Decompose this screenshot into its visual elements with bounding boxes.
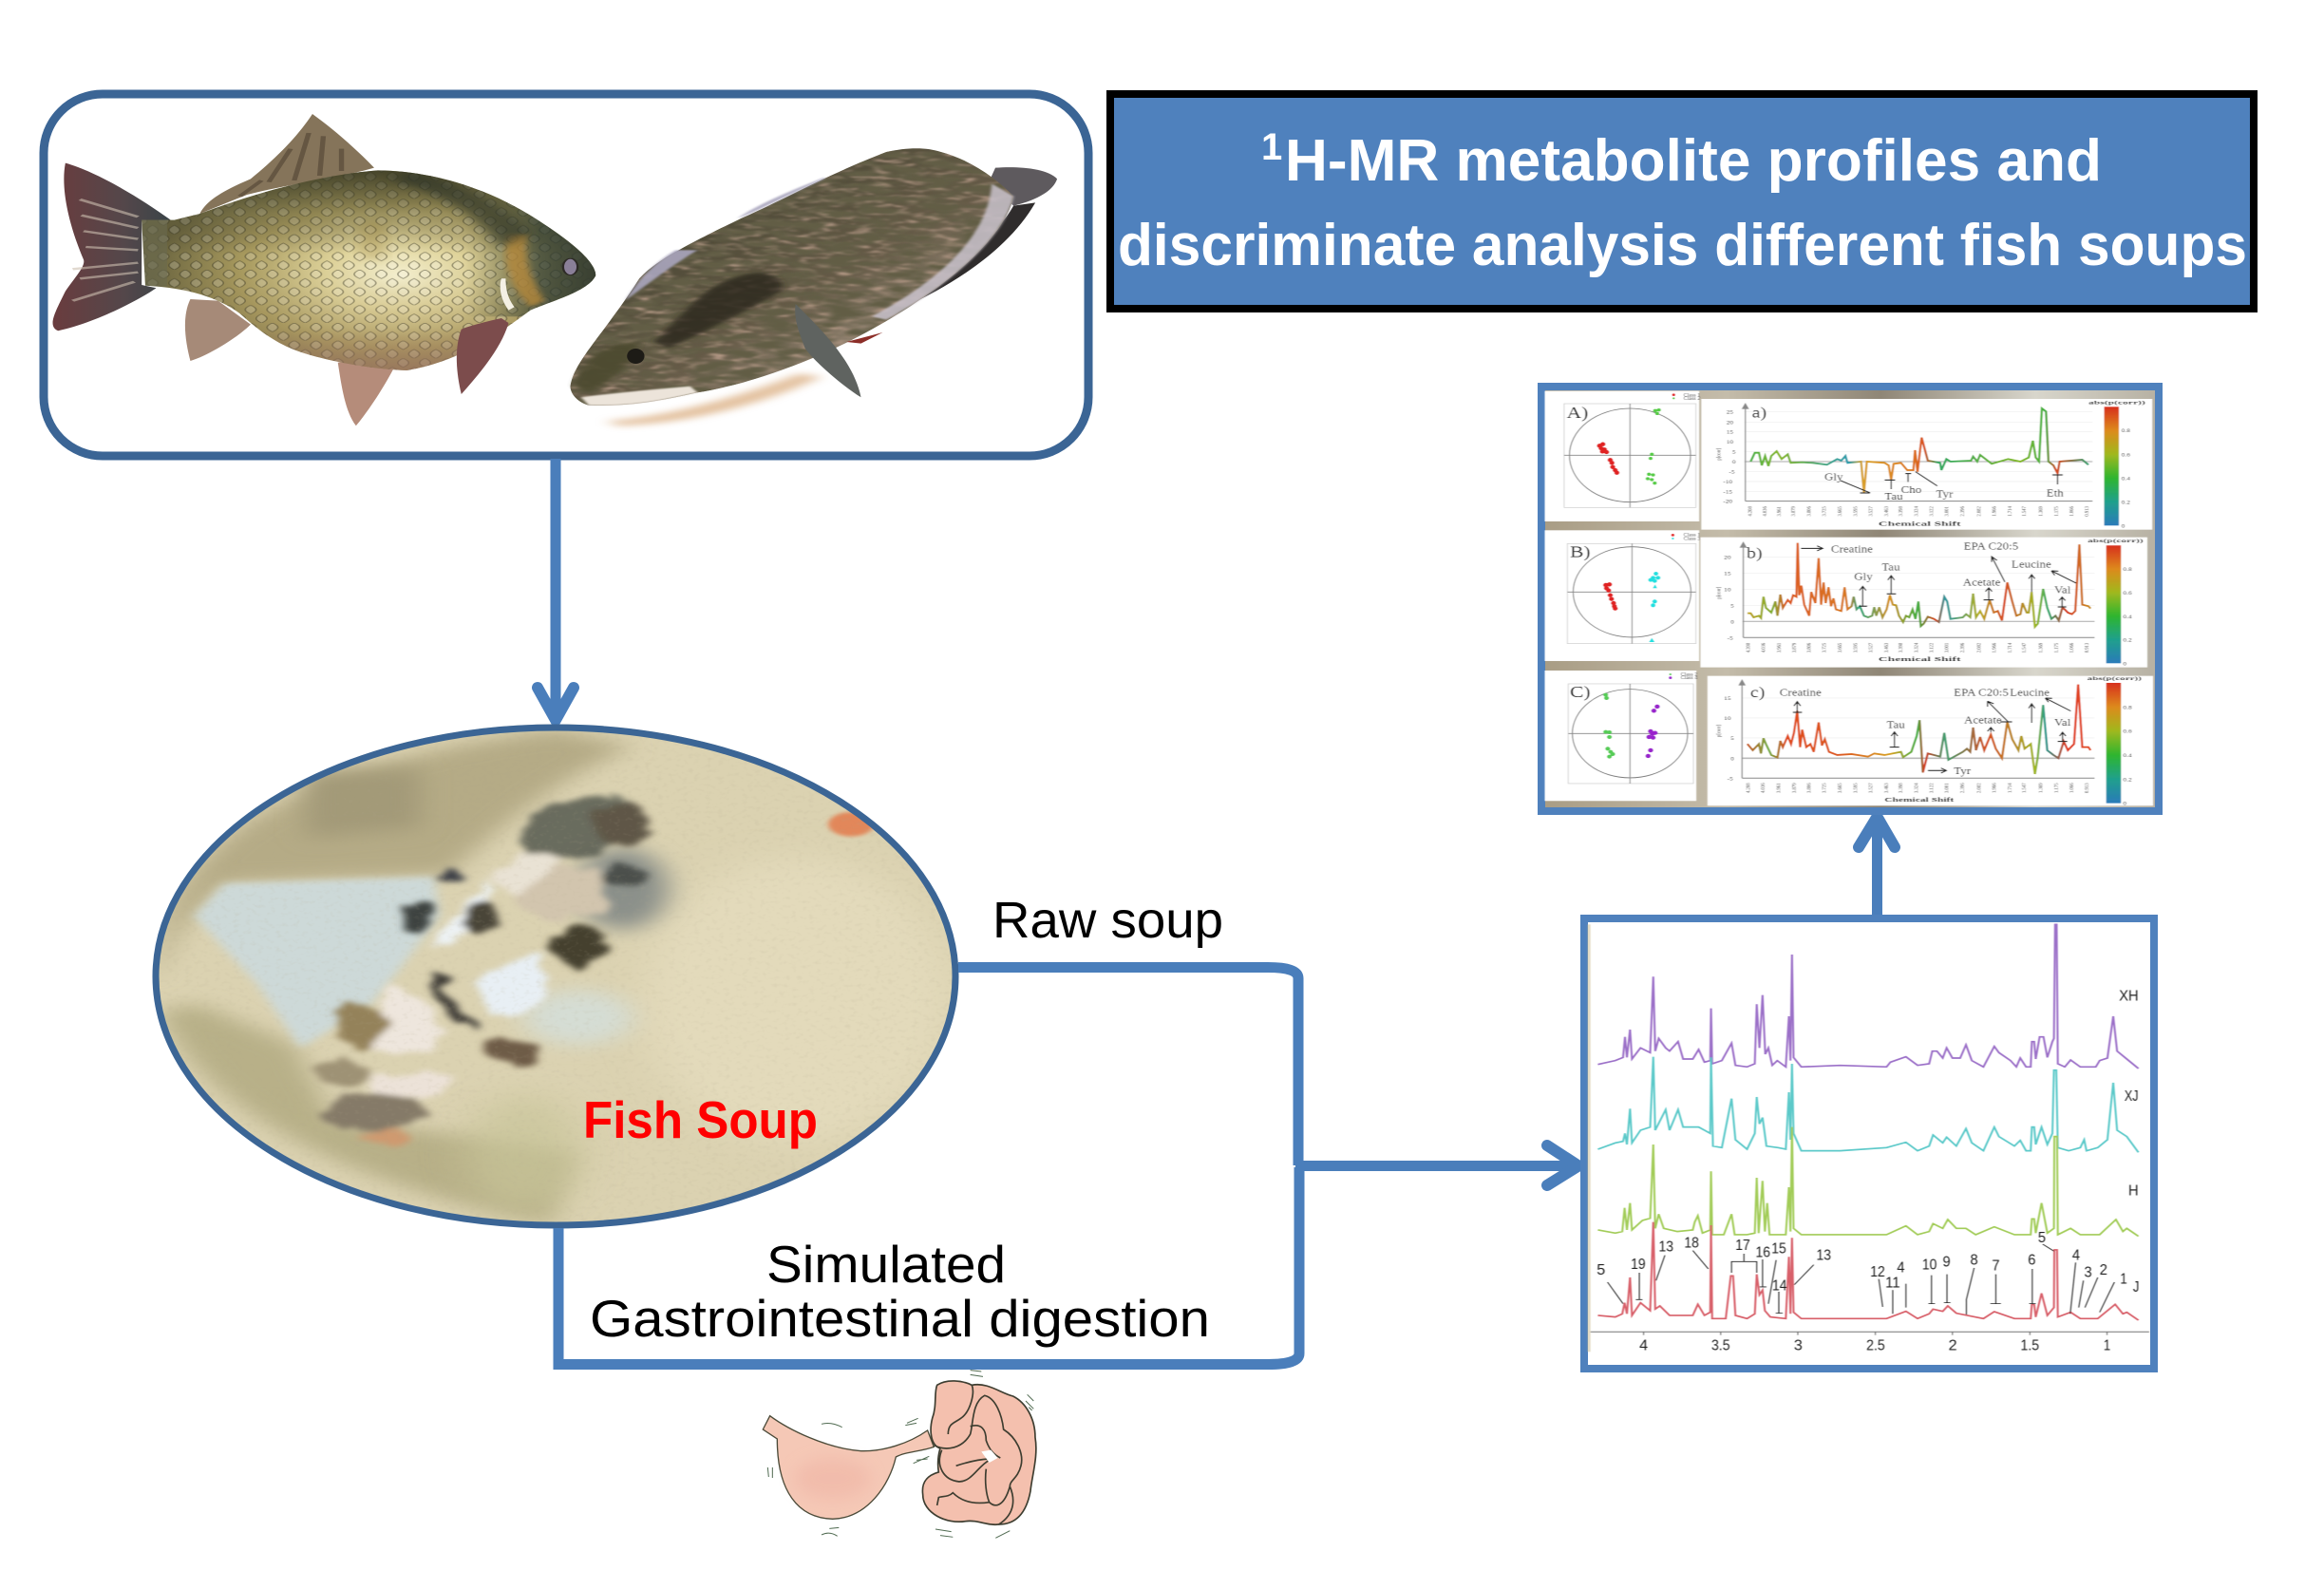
tick labels a: 1.369 (2038, 506, 2045, 517)
tick labels c (1746, 783, 2090, 793)
loading plot a: Cho (1901, 484, 1922, 496)
loading plot b: Gly (1854, 572, 1873, 582)
tick labels a: 1.175 (2053, 506, 2060, 517)
trace: XH (1597, 924, 2139, 1069)
labels: x axis: 3.5 (1711, 1336, 1730, 1353)
labels: x axis: 2.5 (1866, 1336, 1885, 1353)
image: snakehead fish (571, 148, 1057, 426)
loading plot c: 0.6 (2123, 728, 2132, 734)
tick labels a: 3.725 (1822, 506, 1828, 517)
loading plot a: -10 (1723, 480, 1733, 485)
tick labels b: 1.966 (1992, 643, 1998, 653)
loading plot b: 15 (1724, 571, 1731, 577)
trace: H (1597, 1127, 2139, 1237)
tick labels c: 1.175 (2053, 783, 2060, 793)
labels: trace names (2119, 987, 2139, 1296)
labels: peak numbers: 15 (1771, 1239, 1786, 1257)
labels: x axis: 1 (2104, 1336, 2110, 1353)
score plot A (1545, 391, 1701, 521)
panel: fish soup photo (142, 719, 971, 1235)
loading plot c: 0.8 (2123, 705, 2132, 710)
loading plot b: Tau (1881, 562, 1900, 573)
title text: 1 (1261, 126, 1282, 168)
labels: peak numbers: 13 (1817, 1246, 1831, 1263)
loading plot a: -5 (1729, 469, 1735, 475)
tick labels b: 3.324 (1914, 643, 1920, 653)
tick labels b: 3.398 (1898, 643, 1904, 653)
score plot C (1545, 671, 1698, 801)
loading plot a: 0.2 (2122, 500, 2130, 505)
tick labels b: 3.725 (1822, 643, 1828, 653)
loading plot c: Creatine (1780, 688, 1822, 698)
labels: x axis: 3 (1794, 1336, 1803, 1353)
tick labels b: 1.066 (2069, 643, 2075, 653)
labels: peak numbers: 18 (1684, 1234, 1699, 1251)
labels: peak numbers: 10 (1922, 1256, 1937, 1273)
tick labels c: 3.324 (1914, 783, 1920, 793)
loading plot b: 10 (1724, 587, 1731, 593)
chart: stacked spectra (1587, 924, 2149, 1353)
loading plot a: 20 (1727, 420, 1734, 426)
tick labels a: 1.547 (2022, 506, 2028, 517)
title text (1118, 126, 2247, 278)
score plot C: C) (1570, 684, 1591, 701)
labels: peak numbers: 13 (1658, 1238, 1673, 1255)
tick labels c: 0.913 (2085, 783, 2090, 793)
tick labels a: 4.036 (1762, 506, 1768, 517)
loading plot b: Acetate (1963, 577, 2000, 588)
tick labels b: 3.527 (1868, 643, 1875, 653)
labels: peak numbers: 2 (2100, 1261, 2107, 1278)
tick labels c: 3.398 (1898, 783, 1904, 793)
score plot B: Class 3 (1684, 537, 1701, 541)
label: Simulated Gastrointestinal digestion: Gastrointestinal digestion (590, 1289, 1210, 1348)
score plot C: Class 4 (1681, 676, 1698, 681)
tick labels c: 3.122 (1929, 783, 1936, 793)
tick labels b: 1.175 (2053, 643, 2060, 653)
tick labels b: 1.714 (2007, 643, 2013, 653)
label: Simulated Gastrointestinal digestion: Simulated (766, 1235, 1006, 1294)
tick labels c: 3.463 (1883, 783, 1890, 793)
tick labels a: 2.396 (1960, 506, 1966, 517)
loading plot b: 20 (1724, 555, 1731, 560)
panel: multivariate plots (1541, 387, 2159, 811)
loading plot b: Creatine (1831, 544, 1873, 555)
score plot A: A) (1566, 405, 1588, 422)
loading plot c: Tyr (1954, 766, 1971, 777)
labels: peak numbers: 19 (1631, 1256, 1646, 1273)
tick labels a: 3.398 (1898, 506, 1904, 517)
labels: peak numbers: 11 (1885, 1274, 1900, 1291)
loading plot b: 0.6 (2123, 591, 2132, 596)
tick labels c: 3.595 (1853, 783, 1859, 793)
labels: trace names: XH (2119, 987, 2139, 1004)
tick labels a: 1.714 (2007, 506, 2013, 517)
image: soup contents (142, 719, 971, 1235)
tick labels c: 3.725 (1822, 783, 1828, 793)
loading plot a: -15 (1723, 489, 1733, 495)
loading plot c: 10 (1724, 716, 1731, 722)
loading plot b: 0.8 (2123, 567, 2132, 573)
loading plot c: p[corr] (1716, 725, 1723, 737)
labels: peak numbers: 4 (2072, 1246, 2080, 1263)
tick labels b: 4.208 (1746, 643, 1752, 653)
tick labels c: 3.665 (1838, 783, 1843, 793)
labels: peak numbers: 9 (1943, 1253, 1951, 1270)
labels: peak numbers: 5 (1597, 1261, 1605, 1278)
loading plot c: 0.4 (2123, 753, 2132, 759)
loading plot c: 5 (1730, 736, 1735, 742)
connector: digestion path (558, 1167, 1299, 1364)
tick labels b: 2.396 (1960, 643, 1966, 653)
labels: peak numbers: 14 (1772, 1277, 1787, 1294)
tick labels c: 1.966 (1992, 783, 1998, 793)
labels: peak numbers (1597, 1229, 2127, 1294)
tick labels a: 3.879 (1791, 506, 1797, 517)
labels: trace names: J (2133, 1278, 2139, 1296)
labels: x axis: 2 (1949, 1336, 1957, 1353)
tick labels a: 1.966 (1992, 506, 1998, 517)
tick labels b: 3.665 (1838, 643, 1843, 653)
loading plot a: 15 (1727, 429, 1734, 435)
loading plot a: abs(p(corr)) (2088, 400, 2145, 406)
loading plot a: Tyr (1937, 489, 1954, 500)
loading plot c: Chemical Shift (1884, 796, 1955, 804)
trace: XJ (1597, 1057, 2139, 1152)
icon: stomach and intestines (763, 1371, 1036, 1538)
arrow: spectrum to metabolite plots (1859, 817, 1895, 917)
score plot B (1545, 530, 1701, 661)
tick labels c: 1.547 (2022, 783, 2028, 793)
trace: J (1597, 1222, 2139, 1320)
tick labels b: 3.001 (1944, 643, 1951, 653)
loading plot b: Leucine (2012, 559, 2051, 570)
tick labels b: 3.463 (1883, 643, 1890, 653)
loading plot b: -5 (1728, 635, 1734, 641)
loading plot a: a) (1752, 405, 1767, 422)
tick labels c: 3.961 (1776, 783, 1783, 793)
score plot A: Class 2 (1684, 397, 1701, 402)
arrow: fish to soup (538, 459, 574, 720)
tick labels c: 3.527 (1868, 783, 1875, 793)
score plot C: Class 2 (1681, 672, 1698, 677)
loading plot b: 0.2 (2123, 637, 2132, 643)
tick labels b (1746, 643, 2090, 653)
loading plot b: Chemical Shift (1879, 655, 1961, 663)
tick labels a: 3.324 (1914, 506, 1920, 517)
loading plot b: 0.4 (2123, 615, 2132, 620)
labels: peak numbers: 8 (1971, 1251, 1978, 1268)
title text: discriminate analysis different fish soups (1118, 213, 2247, 278)
tick labels c: 3.806 (1806, 783, 1813, 793)
tick labels a: 3.595 (1853, 506, 1859, 517)
tick labels a: 3.463 (1883, 506, 1890, 517)
loading plot a: 0 (2122, 523, 2126, 529)
tick labels b: 3.122 (1929, 643, 1936, 653)
loading plot c (1708, 676, 2153, 806)
loading plot a: 25 (1727, 409, 1734, 415)
tick labels a: 3.122 (1929, 506, 1936, 517)
labels: peak numbers: 4 (1897, 1258, 1905, 1276)
labels: trace names: XJ (2125, 1088, 2139, 1105)
loading plot a: p[corr] (1716, 448, 1723, 461)
loading plot b: b) (1747, 545, 1763, 562)
tick labels c: 3.879 (1792, 783, 1798, 793)
loading plot a: -20 (1723, 499, 1733, 504)
labels: peak numbers: 5 (2038, 1229, 2046, 1246)
loading plot b: EPA C20:5 (1964, 541, 2018, 552)
tick labels a: 2.082 (1976, 506, 1983, 517)
labels: peak numbers: 3 (2084, 1263, 2092, 1280)
tick labels b: 3.595 (1853, 643, 1859, 653)
loading plot a: 0.8 (2122, 428, 2131, 434)
tick labels c: 4.036 (1761, 783, 1767, 793)
image: crucian carp (53, 114, 603, 426)
panel: title (1110, 94, 2254, 309)
loading plot c: 0 (2123, 801, 2127, 806)
labels: peak numbers: 12 (1870, 1263, 1885, 1280)
labels: peak numbers: 17 (1735, 1237, 1750, 1254)
labels: x axis: 1.5 (2021, 1336, 2039, 1353)
loading plot a: 0.4 (2122, 476, 2131, 482)
panel: NMR spectrum (1584, 918, 2154, 1369)
label: Simulated Gastrointestinal digestion (590, 1235, 1210, 1348)
labels: peak numbers: 1 (2120, 1270, 2127, 1287)
tick labels c: 2.082 (1976, 783, 1983, 793)
tick labels b: 4.036 (1761, 643, 1767, 653)
bones and debris (320, 783, 658, 1143)
tick labels c: 1.714 (2007, 783, 2013, 793)
tick labels a: 3.961 (1777, 506, 1783, 517)
loading plot b: p[corr] (1716, 587, 1723, 599)
tick labels b: 1.547 (2022, 643, 2028, 653)
connector: raw soup path (958, 967, 1298, 1165)
labels: peak numbers: 6 (2028, 1251, 2035, 1268)
loading plot a: 0 (1732, 460, 1736, 465)
title text: H-MR metabolite profiles and (1285, 128, 2102, 194)
tick labels b: 3.879 (1792, 643, 1798, 653)
tick labels c: 1.369 (2038, 783, 2045, 793)
tick labels a (1748, 506, 2090, 517)
loading plot a: 0.6 (2122, 452, 2131, 458)
tick labels b: 3.806 (1806, 643, 1813, 653)
score plot A: Class 1 (1684, 393, 1701, 398)
tick labels a: 3.665 (1838, 506, 1843, 517)
tick labels c: 4.208 (1746, 783, 1752, 793)
loading plot b: Val (2054, 585, 2070, 596)
tick labels a: 3.001 (1944, 506, 1951, 517)
loading plot c: -5 (1728, 776, 1734, 782)
loading plot b: 0 (2123, 661, 2127, 667)
loading plot a: Gly (1824, 472, 1843, 482)
labels: peak numbers: 16 (1755, 1243, 1770, 1260)
tick labels c: 3.001 (1944, 783, 1951, 793)
loading plot c: 15 (1724, 696, 1731, 702)
arrow: to NMR spectrum (1295, 1145, 1578, 1185)
loading plot c: EPA C20:5 (1954, 688, 2009, 698)
tick labels b: 0.913 (2085, 643, 2090, 653)
loading plot c: 0 (1730, 756, 1735, 762)
tick labels b: 3.961 (1777, 643, 1783, 653)
labels: x axis (1639, 1336, 2110, 1353)
loading plot b (1700, 538, 2147, 668)
loading plot b: 5 (1730, 603, 1735, 609)
loading plot c: abs(p(corr)) (2088, 676, 2142, 682)
tick labels b: 1.369 (2038, 643, 2045, 653)
tick labels c: 2.396 (1960, 783, 1966, 793)
loading plot a: Eth (2047, 488, 2064, 499)
tick labels a: 3.527 (1868, 506, 1875, 517)
tick labels c: 1.066 (2069, 783, 2075, 793)
loading plot b: abs(p(corr)) (2088, 539, 2144, 544)
loading plot a: Tau (1884, 491, 1903, 502)
labels: trace names: H (2128, 1182, 2139, 1199)
loading plot c: Leucine (2010, 688, 2050, 698)
tick labels a: 4.208 (1748, 506, 1754, 517)
loading plot c: 0.2 (2123, 777, 2132, 783)
labels: peak numbers: 7 (1992, 1257, 2000, 1274)
loading plot c: c) (1750, 684, 1765, 701)
loading plot a (1701, 399, 2152, 530)
tick labels a: 0.913 (2085, 506, 2090, 517)
score plot B: Class 1 (1684, 533, 1701, 538)
loading plot c: Acetate (1964, 715, 2002, 726)
loading plot b: 0 (1730, 619, 1735, 625)
label: Raw soup: Raw soup (992, 892, 1223, 949)
loading plot a: 5 (1732, 449, 1736, 455)
loading plot a: Chemical Shift (1879, 520, 1961, 527)
tick labels a: 3.806 (1806, 506, 1813, 517)
label: Fish Soup: Fish Soup (583, 1090, 818, 1149)
loading plot c: Tau (1886, 720, 1905, 730)
tick labels a: 1.066 (2069, 506, 2075, 517)
tick labels b: 2.082 (1976, 643, 1983, 653)
labels: x axis: 4 (1639, 1336, 1648, 1353)
score plot B: B) (1570, 544, 1591, 561)
loading plot c: Val (2054, 717, 2070, 728)
panel: fish photo card (44, 94, 1088, 456)
loading plot a: 10 (1727, 440, 1734, 445)
